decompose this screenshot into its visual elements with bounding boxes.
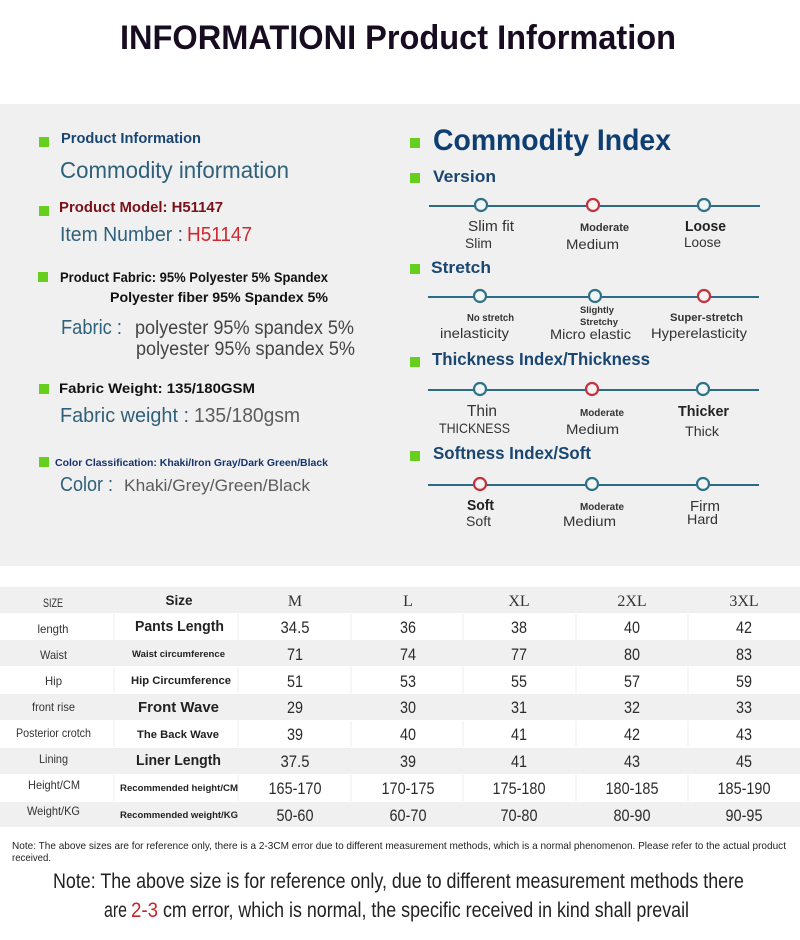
table row: lining: Lining — [39, 752, 68, 766]
table row: recommended weight: 60-70 — [390, 806, 426, 825]
large measurement note: 2-3 — [131, 899, 158, 922]
table row: hip: 57 — [624, 672, 640, 691]
scale: thickness — [410, 349, 759, 439]
table row: pants length: Pants Length — [135, 618, 224, 635]
table row: recommended weight: 90-95 — [726, 806, 762, 825]
table row: front rise: 32 — [624, 698, 640, 717]
table row: pants length: 36 — [400, 618, 416, 637]
product fabric: polyester 95% spandex 5% — [136, 339, 355, 360]
table row: hip: Hip Circumference — [131, 675, 231, 687]
table row: recommended height: Recommended height/CM — [120, 783, 238, 794]
table row: lining: Liner Length — [136, 752, 221, 769]
color classification — [39, 457, 328, 496]
table row: front rise: 33 — [736, 698, 752, 717]
scale: version: Slim — [465, 235, 492, 251]
table row: recommended height: 180-185 — [606, 779, 658, 798]
panel: product details and commodity index — [0, 104, 800, 566]
table row: back rise: 42 — [624, 725, 640, 744]
table row: waist — [40, 645, 752, 664]
fabric weight: Fabric weight : — [60, 405, 189, 427]
scale: stretch: No stretch — [467, 313, 514, 324]
scale: stretch: Stretchy — [580, 317, 619, 328]
table row: waist: 71 — [287, 645, 303, 664]
table row: header — [43, 592, 759, 610]
table row: recommended height: 165-170 — [268, 779, 322, 798]
small measurement note — [12, 840, 786, 864]
table row: front rise: Front Wave — [138, 700, 219, 716]
scale: version: Medium — [566, 236, 619, 252]
table row: front rise: 31 — [511, 698, 527, 717]
table row: hip: 55 — [511, 672, 527, 691]
table row: front rise — [32, 698, 752, 717]
scale: stretch — [410, 258, 759, 342]
table row: waist: Waist circumference — [132, 649, 225, 660]
scale: stretch: Stretch — [431, 258, 491, 277]
scale: stretch: Super-stretch — [670, 312, 743, 324]
scale: version: Loose — [685, 218, 726, 235]
product information heading: Product Information — [61, 131, 201, 147]
fabric weight: 135/180gsm — [194, 405, 300, 427]
table row: lining — [39, 752, 752, 771]
scale: stretch: Micro elastic — [550, 326, 631, 342]
table row: recommended height: 170-175 — [382, 779, 434, 798]
scale: softness: Firm — [690, 498, 720, 515]
scale: softness: Softness Index/Soft — [433, 443, 591, 463]
table row: back rise — [16, 725, 752, 744]
table row: waist: 83 — [736, 645, 752, 664]
scale: version: Moderate — [580, 222, 629, 234]
table row: front rise: 30 — [400, 698, 416, 717]
product fabric — [38, 270, 355, 360]
table row: lining: 41 — [511, 752, 527, 771]
fabric weight — [39, 380, 300, 427]
table row: header: 2XL — [617, 593, 647, 610]
scale: softness: Soft — [467, 497, 494, 514]
table row: header: Size — [166, 592, 193, 608]
table row: lining: 43 — [624, 752, 640, 771]
table row: recommended height: Height/CM — [28, 778, 80, 792]
product fabric: polyester 95% spandex 5% — [135, 318, 354, 339]
small measurement note: received. — [12, 852, 51, 864]
table row: recommended weight: Recommended weight/KG — [120, 810, 238, 821]
size table — [0, 587, 800, 827]
commodity index heading: Commodity Index — [433, 124, 671, 157]
table row: waist: 80 — [624, 645, 640, 664]
table row: hip — [45, 672, 752, 691]
scale: softness: Moderate — [580, 501, 624, 513]
scale: thickness: Thin — [467, 403, 497, 420]
scale: thickness: Medium — [566, 421, 619, 437]
product model: H51147 — [187, 224, 252, 246]
small measurement note: Note: The above sizes are for reference only, there is a 2-3CM error due to different measurement methods, which is a normal phenomenon. Please refer to the actual product — [12, 840, 786, 852]
product model: Product Model: H51147 — [59, 200, 223, 216]
table row: pants length: 42 — [736, 618, 752, 637]
table row: header: 3XL — [729, 593, 759, 610]
table row: hip: 51 — [287, 672, 303, 691]
table row: header: L — [403, 593, 413, 610]
scale: softness: Hard — [687, 511, 718, 527]
scale: version — [410, 167, 760, 252]
table row: lining: 37.5 — [280, 752, 310, 771]
product model — [39, 200, 252, 246]
table row: recommended weight — [27, 804, 762, 825]
product model: Item Number : — [60, 224, 183, 246]
scale: stretch: Hyperelasticity — [651, 325, 747, 341]
table row: pants length: 38 — [511, 618, 527, 637]
table row: hip: 53 — [400, 672, 416, 691]
scale: thickness: Thickness Index/Thickness — [432, 349, 650, 369]
product fabric: Fabric : — [61, 317, 122, 339]
product information heading: Commodity information — [60, 157, 289, 183]
table row: recommended weight: Weight/KG — [27, 804, 80, 818]
table row: hip: 59 — [736, 672, 752, 691]
table row: recommended weight: 80-90 — [614, 806, 650, 825]
table row: recommended height: 175-180 — [492, 779, 546, 798]
table row: back rise: 41 — [511, 725, 527, 744]
table row: hip: Hip — [45, 674, 62, 688]
scale: softness — [410, 443, 759, 529]
table row: waist: 77 — [511, 645, 527, 664]
table row: back rise: The Back Wave — [137, 729, 219, 741]
table row: back rise: 43 — [736, 725, 752, 744]
table row: header: M — [288, 593, 302, 610]
scale: stretch: inelasticity — [440, 325, 509, 341]
scale: softness: Soft — [466, 513, 491, 529]
large measurement note: cm error, which is normal, the specific received in kind shall prevail — [163, 899, 689, 922]
product fabric: Product Fabric: 95% Polyester 5% Spandex — [60, 270, 328, 285]
product fabric: Polyester fiber 95% Spandex 5% — [110, 290, 328, 305]
table row: recommended weight: 70-80 — [500, 806, 538, 825]
table row: pants length — [38, 618, 752, 637]
table row: back rise: 39 — [287, 725, 303, 744]
table row: recommended height — [28, 778, 770, 798]
table row: waist: 74 — [400, 645, 416, 664]
scale: thickness: THICKNESS — [439, 420, 510, 436]
table row: header: XL — [508, 593, 530, 610]
scale: thickness: Thick — [685, 423, 720, 439]
scale: version: Slim fit — [468, 219, 514, 235]
table row: recommended weight: 50-60 — [276, 806, 314, 825]
table row: pants length: 40 — [624, 618, 640, 637]
color classification: Khaki/Grey/Green/Black — [124, 476, 311, 495]
table row: pants length: 34.5 — [280, 618, 310, 637]
scale: version: Loose — [684, 234, 721, 250]
scale: stretch: Slightly — [580, 305, 615, 316]
table row: back rise: 40 — [400, 725, 416, 744]
fabric weight: Fabric Weight: 135/180GSM — [59, 380, 255, 396]
table row: pants length: length — [38, 622, 68, 636]
scale: version: Version — [433, 167, 496, 186]
large measurement note: are — [104, 899, 127, 922]
product information heading — [39, 131, 289, 183]
table row: header: SIZE — [43, 596, 63, 610]
table row: recommended height: 185-190 — [718, 779, 770, 798]
table row: back rise: Posterior crotch — [16, 726, 91, 740]
table row: front rise: 29 — [287, 698, 303, 717]
color classification: Color : — [60, 474, 113, 496]
scale: thickness: Thicker — [678, 403, 729, 420]
scale: softness: Medium — [563, 513, 616, 529]
color classification: Color Classification: Khaki/Iron Gray/Dark Green/Black — [55, 457, 328, 469]
table row: front rise: front rise — [32, 700, 75, 714]
title: INFORMATIONI Product Information — [120, 19, 676, 57]
table row: lining: 39 — [400, 752, 416, 771]
scale: thickness: Moderate — [580, 407, 624, 419]
large measurement note — [53, 870, 744, 922]
table row: waist: Waist — [40, 648, 68, 662]
table row: lining: 45 — [736, 752, 752, 771]
